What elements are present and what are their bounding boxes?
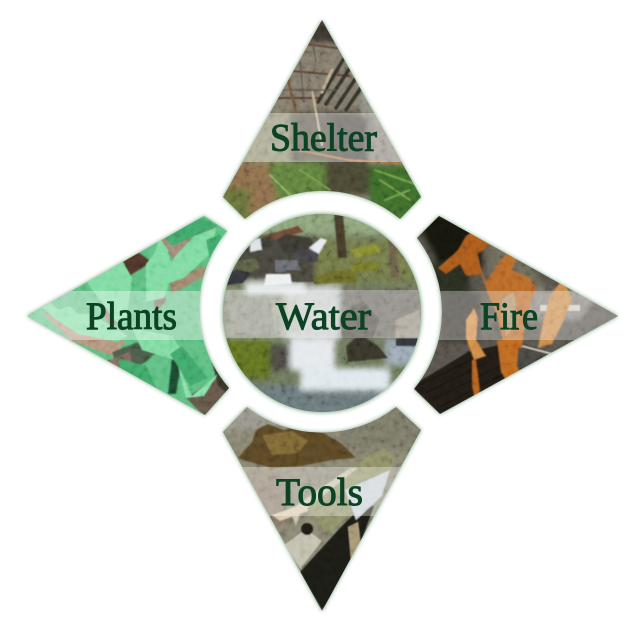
photo: forest stream cascading over rocks	[222, 213, 422, 415]
translucent label band	[28, 291, 204, 340]
photo: tinder bundle and bow drill tools	[221, 405, 425, 613]
panel: fire	[412, 214, 620, 418]
label: Tools: Tools	[276, 471, 363, 514]
photo: green leaves on forest floor	[25, 214, 232, 418]
label: Shelter: Shelter	[270, 116, 377, 160]
photo: campfire flames on a log	[412, 214, 620, 418]
photo grain	[222, 213, 422, 413]
photo grain	[418, 234, 594, 391]
translucent label band	[222, 290, 422, 338]
translucent label band	[242, 113, 402, 162]
panel: plants	[25, 214, 232, 418]
label: Water: Water	[276, 295, 371, 338]
photo: bark lean-to shelter on a forest path	[220, 18, 425, 223]
translucent label band	[242, 467, 400, 516]
panel: tools	[221, 405, 425, 613]
label: Fire: Fire	[480, 295, 538, 338]
translucent label band	[438, 291, 618, 340]
photo grain	[32, 217, 226, 412]
label: Plants: Plants	[86, 295, 177, 338]
panel: water	[222, 213, 422, 415]
photo grain	[221, 405, 423, 613]
photo grain	[224, 34, 418, 218]
panel: shelter	[220, 18, 425, 223]
